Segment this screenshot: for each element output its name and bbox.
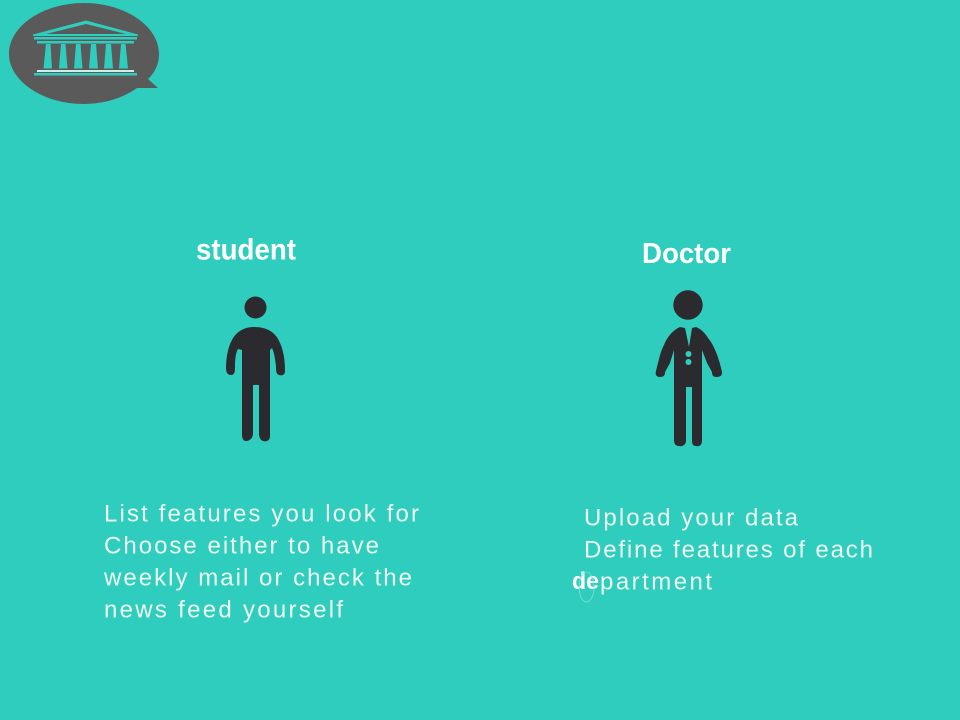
logo: speech bubble with temple icon	[9, 3, 159, 104]
buttons	[686, 351, 692, 357]
faint circle marker	[579, 572, 594, 602]
heading: student: student	[196, 234, 296, 266]
small bold word start: de	[572, 568, 599, 595]
text block: student steps	[103, 500, 419, 624]
suit and legs	[656, 327, 722, 446]
text block: student steps: Choose either to have	[104, 532, 379, 560]
text block: student steps: weekly mail or check the	[103, 564, 412, 592]
heading: Doctor: Doctor	[642, 238, 731, 270]
text block: student steps: news feed yourself	[104, 596, 343, 624]
text block: doctor steps	[572, 504, 873, 602]
speech bubble	[9, 3, 159, 104]
text block: doctor steps: Upload your data	[584, 504, 799, 532]
icon: temple	[33, 20, 138, 76]
head	[673, 290, 703, 320]
text block: doctor steps: partment	[600, 568, 712, 596]
text block: doctor steps: Define features of each	[584, 536, 873, 564]
text block: student steps: List features you look for	[104, 500, 419, 528]
icon: doctor figure	[656, 290, 722, 446]
icon: student figure	[226, 296, 285, 441]
